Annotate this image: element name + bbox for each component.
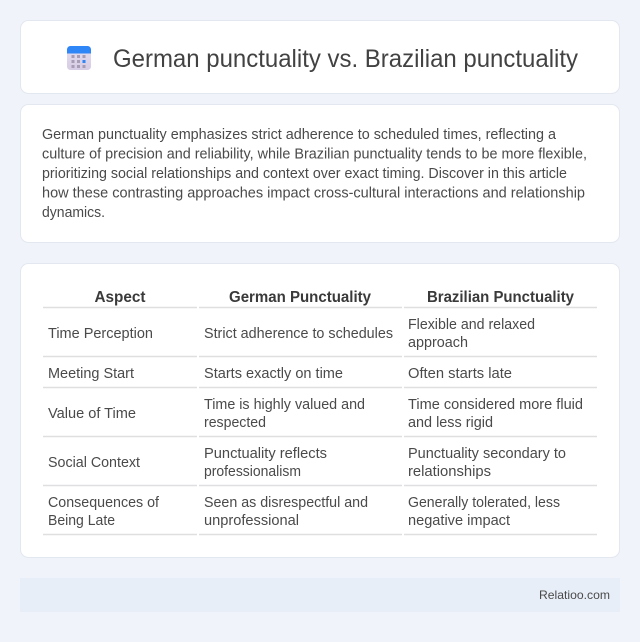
table row: Time Perception bbox=[43, 317, 597, 356]
table row: Value of Time: Value of Time bbox=[48, 406, 136, 422]
text block: introduction paragraph: how these contrasting approaches impact cross-cultural interactions and relationship bbox=[42, 186, 585, 202]
table row: Meeting Start: Often starts late bbox=[408, 366, 512, 382]
table row: Consequences of Being Late bbox=[43, 495, 597, 534]
table row: Social Context: professionalism bbox=[204, 464, 301, 480]
table row: Consequences of Being Late: Generally tolerated, less bbox=[408, 495, 560, 511]
table row: Value of Time: respected bbox=[204, 415, 266, 431]
table row: Meeting Start: Starts exactly on time bbox=[204, 366, 343, 382]
table row: Time Perception: approach bbox=[408, 335, 468, 351]
table row: Social Context: Punctuality secondary to bbox=[408, 446, 566, 462]
text block: introduction paragraph: prioritizing social relationships and context over exact timing. Discover in this article bbox=[42, 166, 567, 182]
footer text: Relatioo.com bbox=[539, 588, 610, 602]
panel: title card bbox=[20, 20, 620, 94]
table row: Social Context: Punctuality reflects bbox=[204, 446, 327, 462]
panel: introduction bbox=[20, 104, 620, 242]
table row: Value of Time: and less rigid bbox=[408, 415, 493, 431]
table header bbox=[43, 289, 597, 308]
table header: German Punctuality bbox=[229, 289, 371, 306]
table row: Consequences of Being Late: Seen as disrespectful and bbox=[204, 495, 368, 511]
table row: Meeting Start bbox=[43, 366, 597, 388]
table row: Time Perception: Flexible and relaxed bbox=[408, 317, 535, 333]
table row: Value of Time: Time is highly valued and bbox=[204, 397, 365, 413]
table header: Aspect bbox=[94, 289, 146, 306]
text block: introduction paragraph bbox=[42, 127, 587, 221]
footer bar bbox=[20, 578, 620, 612]
text block: introduction paragraph: dynamics. bbox=[42, 205, 105, 221]
table row: Value of Time: Time considered more fluid bbox=[408, 397, 583, 413]
text block: introduction paragraph: culture of precision and reliability, while Brazilian punctuality tends to be more flexible, bbox=[42, 146, 587, 162]
table row: Social Context: Social Context bbox=[48, 455, 140, 471]
table header: Brazilian Punctuality bbox=[427, 289, 574, 306]
table row: Consequences of Being Late: unprofessional bbox=[204, 513, 299, 529]
table row: Time Perception: Time Perception bbox=[48, 326, 153, 342]
title: German punctuality vs. Brazilian punctuality bbox=[113, 45, 578, 73]
table row: Meeting Start: Meeting Start bbox=[48, 366, 134, 382]
table row: Consequences of Being Late: Consequences of bbox=[48, 495, 160, 511]
icon: calendar bbox=[67, 46, 91, 70]
table row: Consequences of Being Late: negative impact bbox=[408, 513, 510, 529]
table row: Value of Time bbox=[43, 397, 597, 436]
table row: Time Perception: Strict adherence to schedules bbox=[204, 326, 393, 342]
panel: comparison table bbox=[20, 264, 620, 558]
table row: Social Context bbox=[43, 446, 597, 486]
table row: Social Context: relationships bbox=[408, 464, 491, 480]
text block: introduction paragraph: German punctuality emphasizes strict adherence to scheduled times, reflecting a bbox=[42, 127, 556, 143]
table row: Consequences of Being Late: Being Late bbox=[48, 513, 115, 529]
